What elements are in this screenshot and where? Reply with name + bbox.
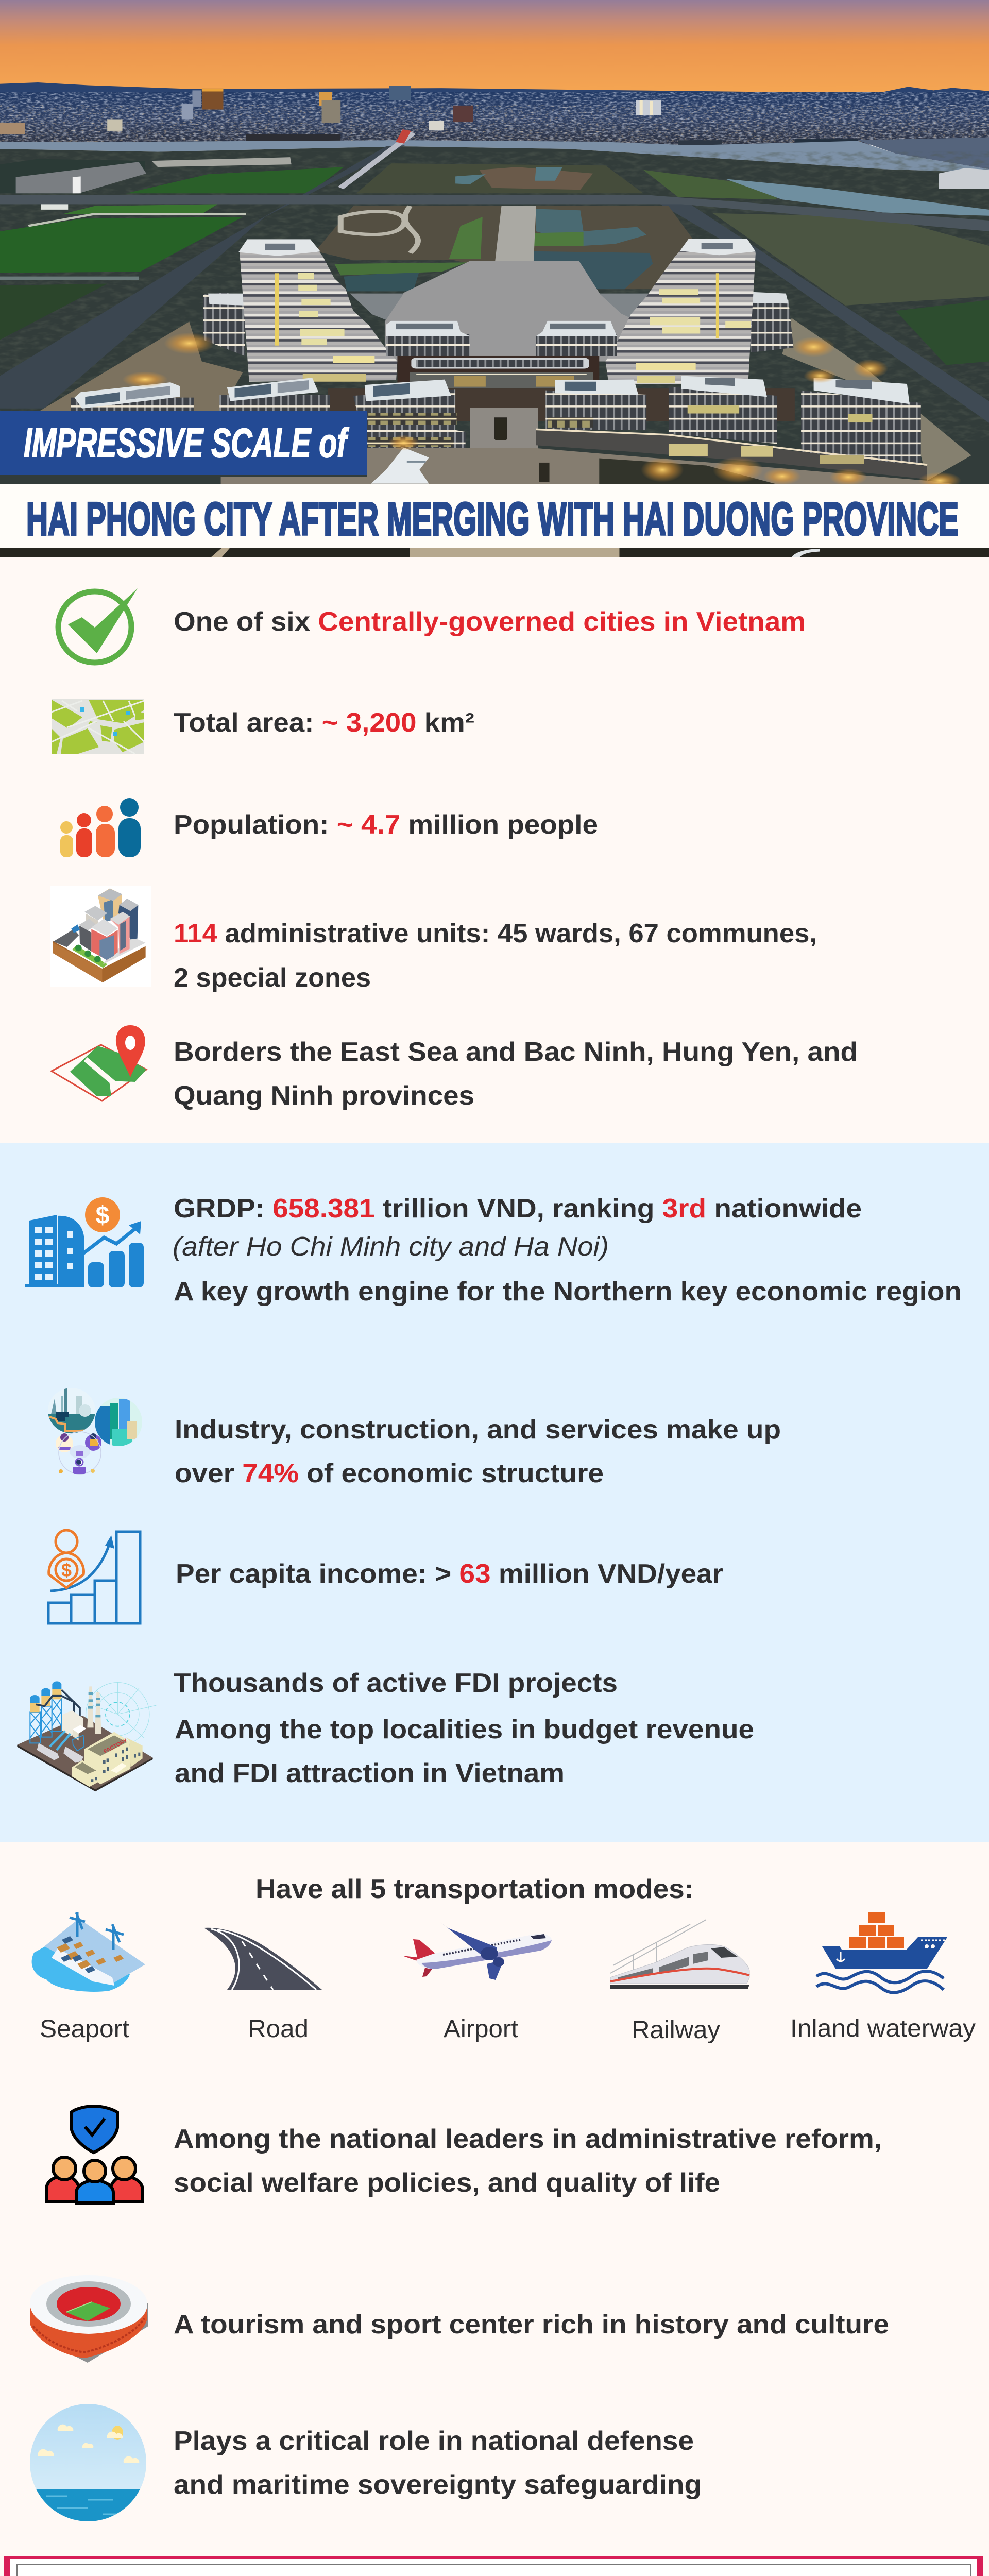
icon: GRDP growth xyxy=(25,1197,144,1287)
text: national defense: Plays a critical role in national defense xyxy=(174,2426,694,2456)
icon: check mark xyxy=(58,588,138,663)
map frame xyxy=(4,2556,983,2576)
icon: factory: FACTORY xyxy=(103,1737,129,1755)
text: GRDP: GRDP: 658.381 trillion VND, ranking 3rd nationwide xyxy=(174,1194,862,1224)
text: tourism and sport: A tourism and sport center rich in history and culture xyxy=(174,2310,889,2340)
foreground plaza xyxy=(123,332,971,489)
icon: map pin xyxy=(52,1025,146,1101)
left tower xyxy=(203,239,397,382)
panel: general facts xyxy=(0,557,989,1143)
text: FDI attraction: and FDI attraction in Vietnam xyxy=(175,1758,565,1788)
park and plaza xyxy=(315,206,694,362)
panel: transport and roles xyxy=(0,1842,989,2556)
icon: airplane xyxy=(402,1922,552,1980)
panel: economy xyxy=(0,1143,989,1842)
text: maritime sovereignty: and maritime sovereignty safeguarding xyxy=(174,2470,702,2500)
label: inland waterway: Inland waterway xyxy=(790,2015,976,2042)
icon: sea and sky xyxy=(30,2404,146,2522)
icon: seaport xyxy=(32,1912,145,1992)
left low buildings xyxy=(16,162,146,193)
strip under title band xyxy=(0,548,989,557)
green fields xyxy=(0,159,989,365)
sky xyxy=(0,0,989,95)
text: top localities: Among the top localities in budget revenue xyxy=(175,1715,754,1744)
right tower xyxy=(606,239,793,384)
text: per capita income: Per capita income: > 63 million VND/year xyxy=(176,1559,723,1589)
icon: per capita income xyxy=(48,1530,140,1623)
label: airport: Airport xyxy=(444,2015,518,2043)
text: special zones: 2 special zones xyxy=(174,963,371,993)
text: population: Population: ~ 4.7 million people xyxy=(174,810,598,840)
icon: people xyxy=(60,798,141,857)
icon: people with shield xyxy=(46,2106,143,2203)
lit ground around buildings xyxy=(38,321,243,412)
front building blocks xyxy=(71,376,927,479)
ground xyxy=(0,146,989,484)
text: thousands of FDI projects: Thousands of active FDI projects xyxy=(174,1668,618,1698)
text: administrative units: 114 administrative units: 45 wards, 67 communes, xyxy=(174,919,817,948)
heading: transport modes: Have all 5 transportation modes: xyxy=(255,1874,694,1904)
right canal xyxy=(725,179,989,216)
icon: per capita income: $ xyxy=(61,1560,72,1581)
text: growth engine: A key growth engine for the Northern key economic region xyxy=(174,1277,962,1307)
text: after HCMC and Ha Noi: (after Ho Chi Minh city and Ha Noi) xyxy=(173,1232,609,1262)
subtitle box: impressive scale: IMPRESSIVE SCALE of xyxy=(24,420,349,466)
text: quang ninh provinces: Quang Ninh provinces xyxy=(174,1081,474,1111)
text: social welfare: social welfare policies, and quality of life xyxy=(174,2168,720,2198)
icon: industry and services xyxy=(48,1388,142,1474)
distant hills xyxy=(0,82,989,92)
map: border frame xyxy=(17,2565,971,2576)
icon: city block xyxy=(50,886,151,987)
text: over 74 percent: over 74% of economic structure xyxy=(175,1459,604,1488)
icon: factory xyxy=(17,1681,156,1791)
text: borders: Borders the East Sea and Bac Ninh, Hung Yen, and xyxy=(174,1037,858,1067)
icon: road xyxy=(204,1928,322,1990)
city band xyxy=(0,86,989,148)
centre blocks and connector xyxy=(328,321,795,454)
text: centrally-governed: One of six Centrally-governed cities in Vietnam xyxy=(174,607,806,637)
icon: GRDP growth: $ xyxy=(96,1202,110,1229)
label: road: Road xyxy=(248,2015,309,2043)
icon: land map tile xyxy=(52,699,144,754)
label: railway: Railway xyxy=(632,2016,720,2044)
text: national leaders: Among the national leaders in administrative reform, xyxy=(174,2124,882,2154)
icon: stadium xyxy=(30,2275,148,2363)
text: total area: Total area: ~ 3,200 km² xyxy=(174,708,474,738)
roads xyxy=(0,130,989,423)
subtitle box: impressive scale xyxy=(0,411,367,475)
label: seaport: Seaport xyxy=(40,2015,129,2043)
text: industry: Industry, construction, and services make up xyxy=(175,1415,781,1445)
icon: train xyxy=(610,1920,749,1989)
hero aerial photo xyxy=(0,0,989,557)
icon: cargo ship xyxy=(816,1912,947,1993)
river xyxy=(0,140,989,173)
